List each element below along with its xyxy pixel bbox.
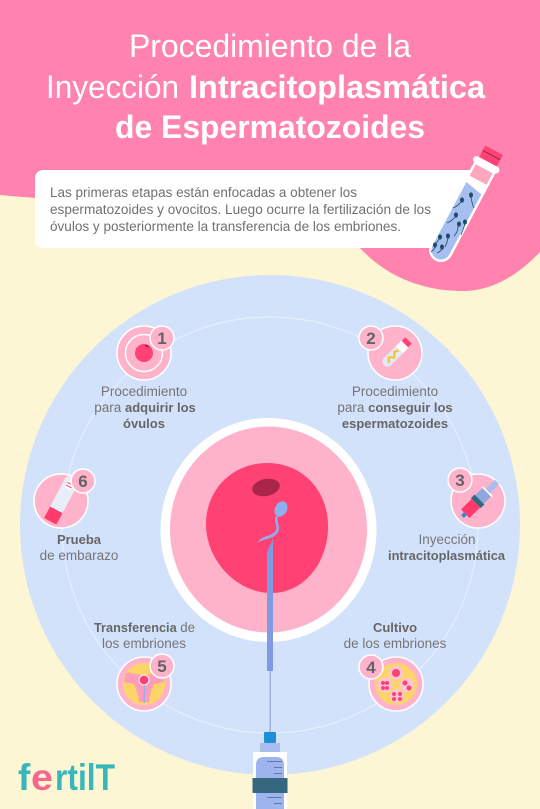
icon: syringe small xyxy=(451,474,505,528)
logo: rtilT xyxy=(55,757,115,798)
step 4 xyxy=(344,620,447,711)
pink header blob xyxy=(0,0,540,291)
icon: sperm tube xyxy=(368,326,422,380)
label 5 xyxy=(94,620,195,651)
badge 1: 1 xyxy=(157,329,167,348)
badge 2: 2 xyxy=(366,329,376,348)
label 1 xyxy=(94,384,196,431)
inner ring xyxy=(62,317,478,733)
step 2 xyxy=(337,326,453,431)
label 6 xyxy=(40,532,118,563)
step 1 xyxy=(94,326,196,431)
title: Inyección xyxy=(46,69,179,105)
label 2: Procedimiento xyxy=(352,384,438,399)
label 3: intracitoplasmática xyxy=(388,548,506,563)
label 2: espermatozoides xyxy=(342,416,448,431)
intro card: óvulos y posteriormente la transferencia de los embriones. xyxy=(50,219,401,234)
egg nucleus xyxy=(251,476,281,499)
label 6: de embarazo xyxy=(40,548,118,563)
step 5 xyxy=(94,620,195,711)
badge 3: 3 xyxy=(455,471,465,490)
icon: test tube with sperm xyxy=(423,143,507,267)
icon: uterus xyxy=(117,657,171,711)
label 3 xyxy=(388,532,506,563)
label 1: óvulos xyxy=(123,416,165,431)
label 1: para adquirir los xyxy=(94,400,196,415)
label 4: Cultivo xyxy=(373,620,417,635)
label 3: Inyección xyxy=(418,532,476,547)
label 2: para conseguir los xyxy=(337,400,453,415)
icon: syringe xyxy=(252,539,288,809)
badge 6: 6 xyxy=(78,472,88,491)
icon: pregnancy test xyxy=(34,474,88,528)
logo: f xyxy=(18,757,31,798)
title xyxy=(46,28,485,145)
label 4: de los embriones xyxy=(344,636,447,651)
label 5: los embriones xyxy=(102,636,186,651)
icon: ovum xyxy=(117,326,171,380)
label 4 xyxy=(344,620,447,651)
logo xyxy=(18,757,115,798)
icon: sperm xyxy=(257,499,290,543)
step 6 xyxy=(34,469,118,563)
label 1: Procedimiento xyxy=(101,384,187,399)
title: Intracitoplasmática xyxy=(189,69,485,105)
logo: e xyxy=(31,757,53,798)
intro card: Las primeras etapas están enfocadas a obtener los xyxy=(50,185,357,200)
main blue circle xyxy=(20,275,520,775)
intro card xyxy=(35,170,478,248)
badge 4: 4 xyxy=(366,658,376,677)
badge 5: 5 xyxy=(157,657,167,676)
label 6: Prueba xyxy=(57,532,102,547)
egg cell xyxy=(160,418,376,642)
label 2 xyxy=(337,384,453,431)
label 5: Transferencia de xyxy=(94,620,195,635)
title: de Espermatozoides xyxy=(115,109,425,145)
intro card: espermatozoides y ovocitos. Luego ocurre la fertilización de los xyxy=(50,202,431,217)
step 3 xyxy=(388,468,506,563)
title: Procedimiento de la xyxy=(129,28,411,64)
icon: embryo culture xyxy=(369,657,423,711)
